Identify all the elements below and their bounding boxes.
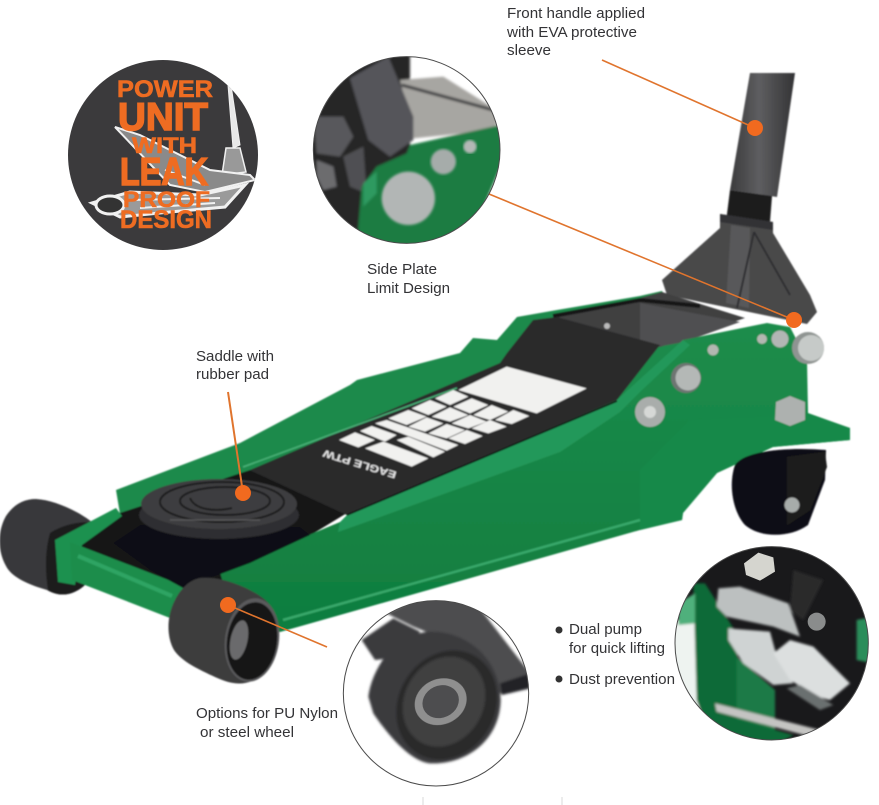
badge text: WITH xyxy=(132,133,197,158)
callout: front handle: with EVA protective xyxy=(506,25,637,41)
badge text: POWER xyxy=(117,76,213,103)
bolts xyxy=(635,330,824,427)
callout: dual pump and dust prevention: for quick lifting xyxy=(569,641,665,657)
data panel on plate xyxy=(339,367,587,467)
callout: wheel: Options for PU Nylon xyxy=(196,706,338,722)
rear wheel xyxy=(732,449,827,535)
wheel photo xyxy=(360,601,528,766)
yoke xyxy=(662,214,817,324)
handle xyxy=(730,73,795,197)
callout: saddle: Saddle with xyxy=(196,349,274,365)
callout: front handle: Front handle applied xyxy=(507,6,645,22)
callout: saddle xyxy=(196,349,274,501)
detail circle: side plate xyxy=(310,53,503,247)
detail circle: wheel xyxy=(342,600,530,786)
saddle assembly xyxy=(113,479,310,588)
callout: side plate limit: Limit Design xyxy=(367,281,450,297)
callout: side plate limit xyxy=(367,194,802,328)
rear side fold xyxy=(640,414,850,530)
floor jack photo xyxy=(0,73,850,685)
callout: wheel xyxy=(196,597,338,741)
plate brand text: EAGLE PTW xyxy=(321,447,398,480)
lower side face xyxy=(220,323,850,632)
front rail xyxy=(55,508,122,585)
badge text: UNIT xyxy=(118,96,208,139)
top green surface xyxy=(116,291,690,515)
handle neck xyxy=(726,190,772,222)
badge: power unit with leak proof design xyxy=(68,60,258,250)
callout: side plate limit: Side Plate xyxy=(367,262,437,278)
side bevel xyxy=(338,340,690,532)
callout: dual pump and dust prevention xyxy=(556,622,675,688)
badge text: DESIGN xyxy=(120,206,212,234)
callout: wheel: or steel wheel xyxy=(200,725,294,741)
badge text: PROOF xyxy=(123,187,210,212)
callout: saddle: rubber pad xyxy=(196,367,269,383)
far wheel xyxy=(0,499,93,595)
callout: dual pump and dust prevention: Dust prevention xyxy=(569,672,675,688)
jack line illustration in badge xyxy=(92,85,255,217)
rear tray xyxy=(553,292,745,347)
badge text: LEAK xyxy=(120,151,208,194)
chassis cavity xyxy=(75,470,347,592)
callout: front handle xyxy=(506,6,763,136)
callout: dual pump and dust prevention: Dual pump xyxy=(569,622,642,638)
detail circle: dual pump xyxy=(670,543,877,747)
callout: front handle: sleeve xyxy=(507,43,551,59)
badge text xyxy=(117,76,213,234)
side plate photo xyxy=(310,53,503,247)
near wheel xyxy=(168,578,285,685)
pump photo xyxy=(676,547,868,740)
black plate xyxy=(250,317,660,515)
